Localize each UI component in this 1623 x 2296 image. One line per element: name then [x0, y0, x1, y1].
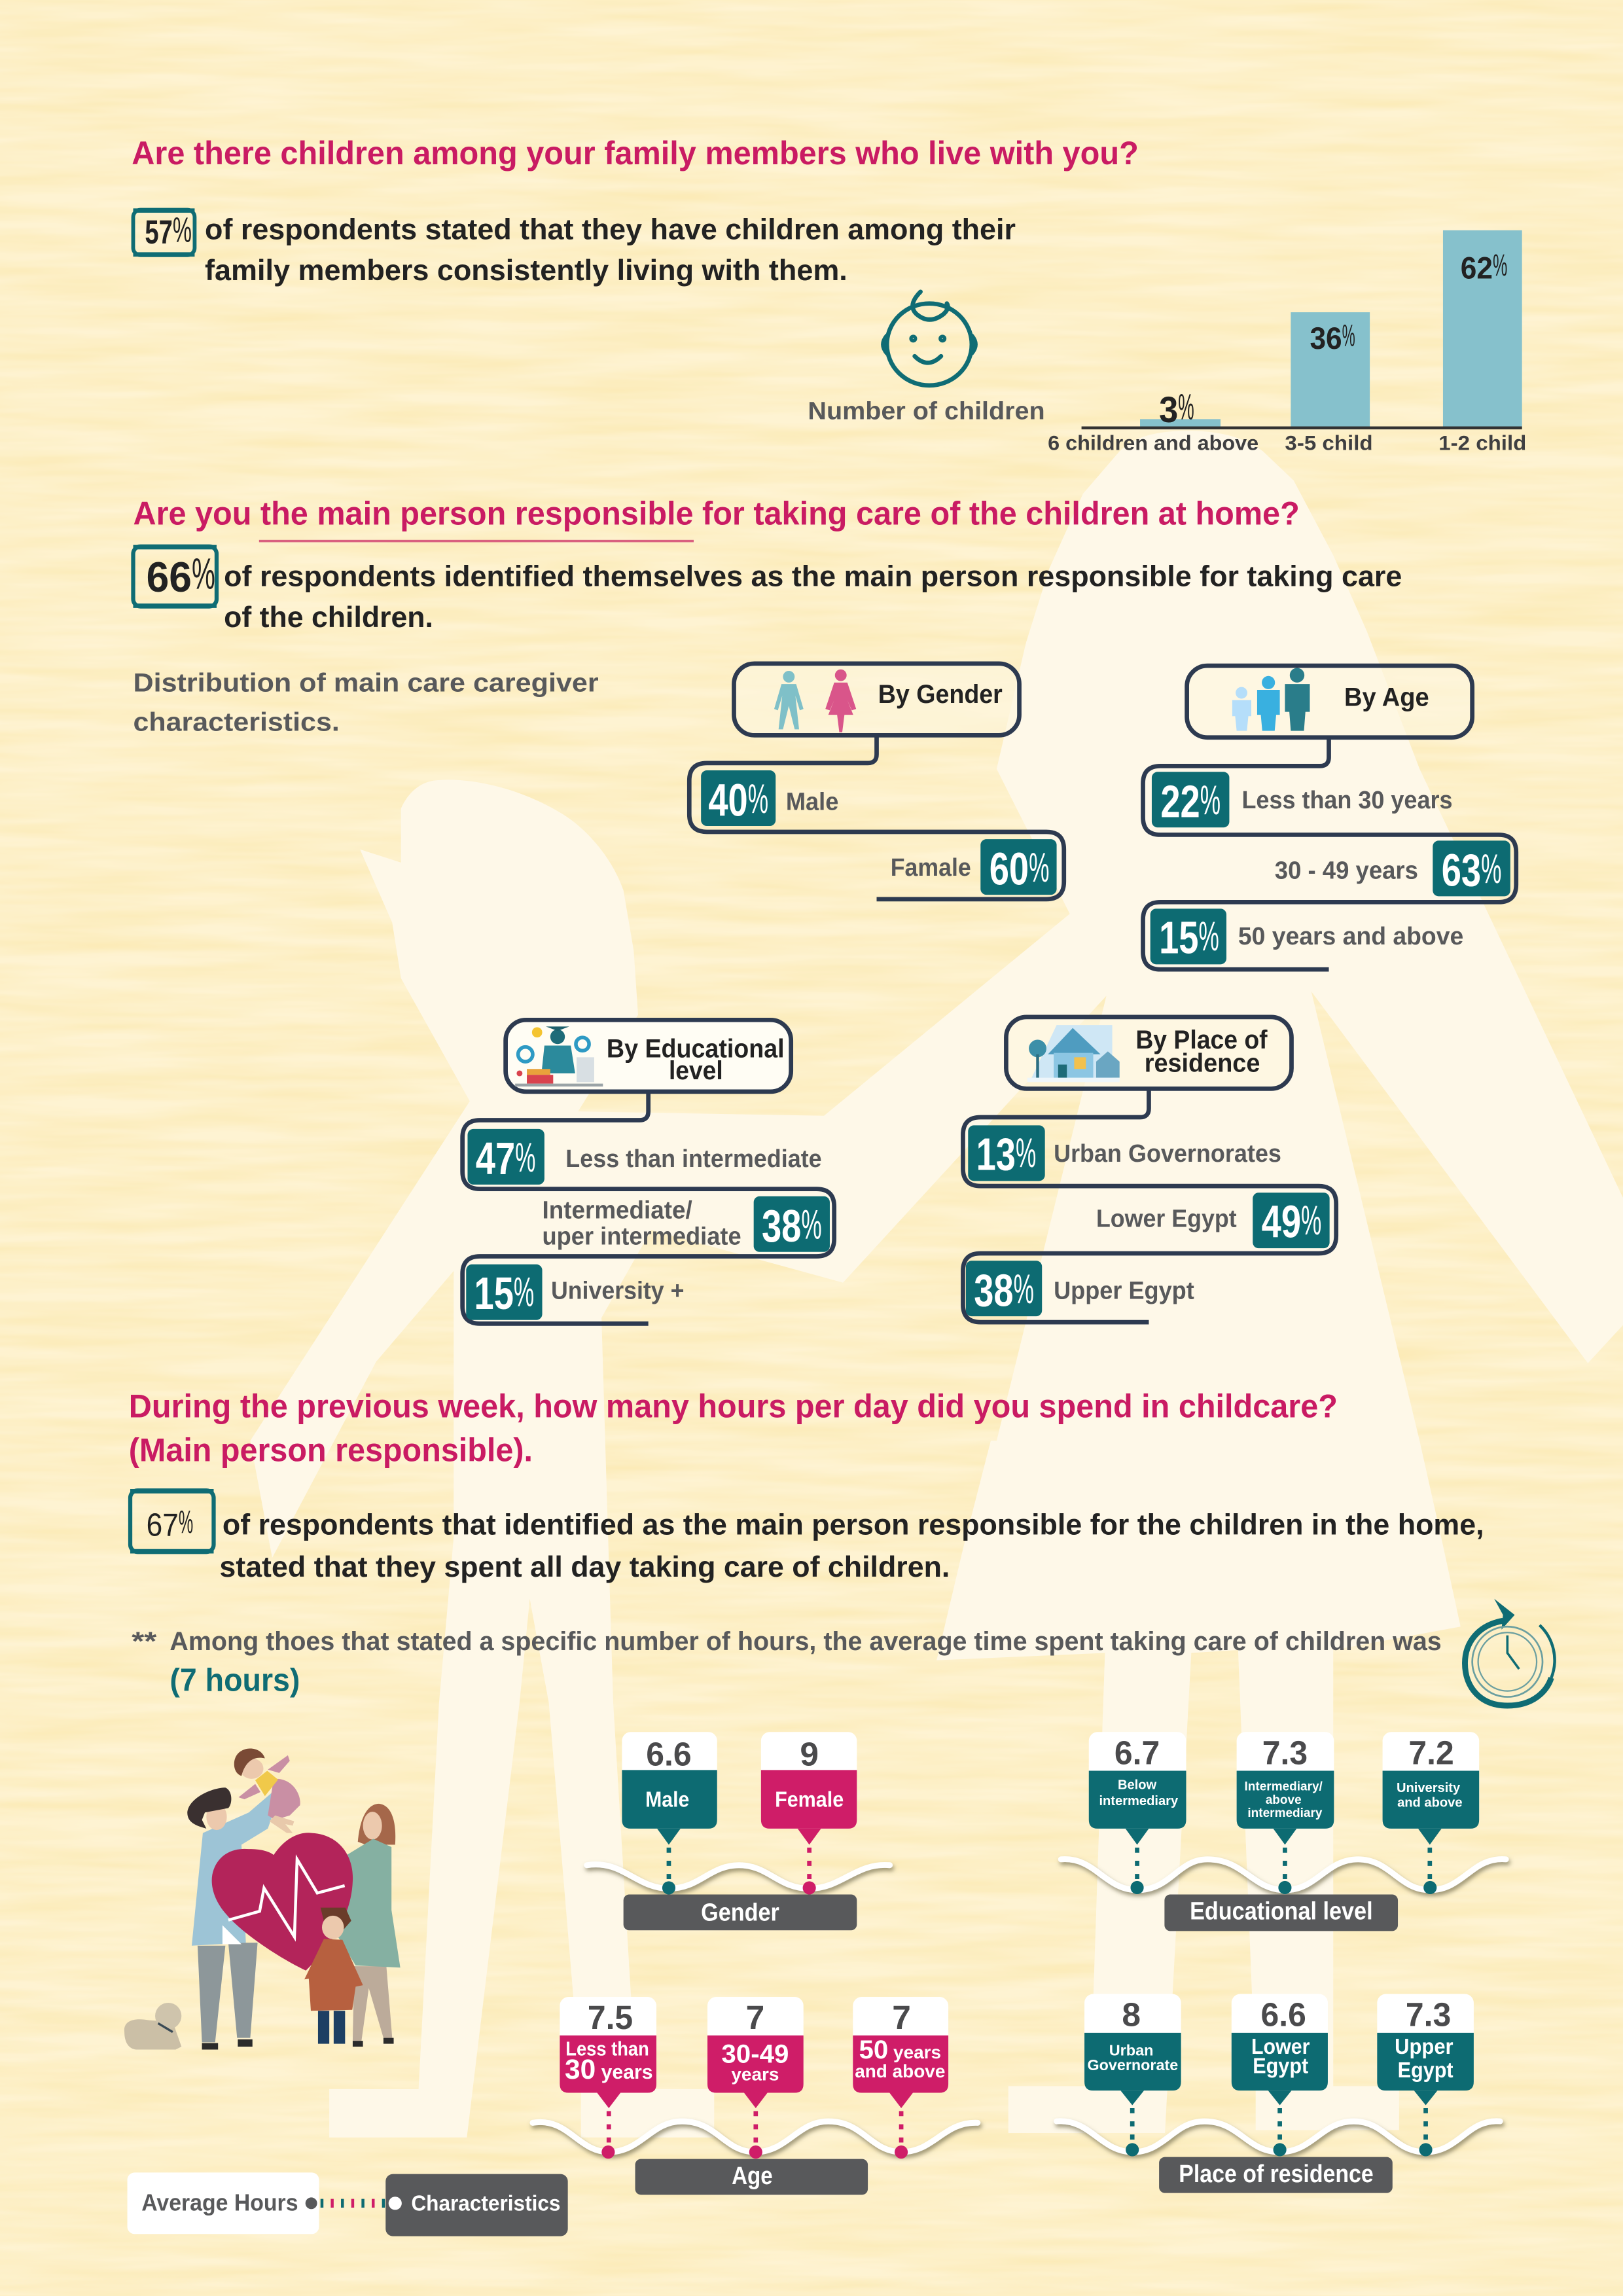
stat: 50 and above: [1150, 908, 1463, 964]
pin: intermediary 7.3: Intermediary/: [1245, 1780, 1323, 1794]
pin: female 9: [761, 1732, 857, 1894]
stat: lower egypt: [1096, 1193, 1330, 1248]
pin: 30-49 7: years: [731, 2064, 779, 2084]
bar chart: number of children: 62: [1461, 251, 1493, 285]
pin: less than 30 7.5: 30 years: [565, 2054, 653, 2085]
text: average time note: **: [132, 1626, 157, 1656]
bar: educational level: Educational level: [1190, 1898, 1373, 1926]
pin: 50 and above 7: 50 years: [859, 2035, 941, 2064]
pin: less than 30 7.5: [560, 1997, 656, 2159]
legend: average hours box: Average Hours: [141, 2190, 298, 2216]
pin: lower egypt 6.6: Egypt: [1253, 2054, 1308, 2078]
title: main person responsible: Are you the main person responsible for taking care of the children at home?: [133, 494, 1300, 531]
stat: female 60 percent: %: [1029, 845, 1049, 891]
pin: below intermediary 6.7: [1089, 1732, 1186, 1894]
stat: 30 to 49: %: [1481, 846, 1501, 892]
stat: urban governorates: Urban Governorates: [1054, 1140, 1281, 1168]
panel: place of residence hours: [1057, 1994, 1500, 2193]
pin: intermediary 7.3: 7.3: [1262, 1733, 1308, 1771]
background silhouette: family: [250, 431, 1623, 2138]
stat box 57%: [133, 210, 194, 255]
bar: gender: [624, 1894, 857, 1930]
header: by place of residence: [1006, 1017, 1291, 1088]
pin: 30-49 7: 30-49: [721, 2039, 789, 2069]
stat box 57%: %: [173, 211, 192, 250]
pin: below intermediary 6.7: 6.7: [1115, 1733, 1160, 1771]
text: average time note: Among thoes that stated a specific number of hours, the average time spent taking care of children was: [169, 1626, 1442, 1656]
bar chart: number of children: 6 children and above: [1048, 431, 1258, 454]
stat box 57%: 57: [145, 213, 173, 251]
stat: less than intermediate: 47: [476, 1133, 515, 1184]
stat: under 30: [1152, 772, 1452, 827]
pin: lower egypt 6.6: 6.6: [1261, 1996, 1306, 2034]
stat: urban governorates: %: [1016, 1130, 1036, 1176]
stat: lower egypt: 49: [1262, 1196, 1301, 1247]
stat box 66%: 66: [147, 553, 192, 601]
pin: university 7.2: and above: [1397, 1795, 1463, 1810]
stat: lower egypt: %: [1301, 1198, 1321, 1244]
pin: intermediary 7.3: [1237, 1732, 1334, 1894]
header: by educational level: By Educational: [607, 1033, 785, 1063]
pin: male 6.6: Male: [645, 1787, 689, 1812]
text: 57 percent statement: [205, 213, 1016, 287]
header: by place of residence: residence: [1145, 1049, 1260, 1078]
pin: male 6.6: 6.6: [646, 1735, 692, 1773]
header: by educational level: [506, 1020, 791, 1092]
icon: three age figures: [1232, 668, 1310, 731]
bar chart: number of children: %: [1493, 247, 1507, 282]
stat: male 40 percent: 40: [708, 774, 748, 825]
pin: urban 8: Governorate: [1088, 2056, 1178, 2073]
pin: female 9: 9: [800, 1735, 819, 1773]
header: by gender: [734, 664, 1020, 735]
pin: below intermediary 6.7: intermediary: [1099, 1794, 1179, 1808]
icon: male figure: [774, 671, 804, 729]
bar chart: number of children: 1-2 child: [1438, 431, 1526, 454]
panel: by age: [1143, 666, 1516, 969]
pin: lower egypt 6.6: [1232, 1994, 1328, 2157]
stat: less than intermediate: [467, 1129, 822, 1185]
pin: upper egypt 7.3: 7.3: [1406, 1996, 1451, 2034]
bar chart: number of children: 36: [1310, 321, 1342, 355]
text: 57 percent statement: family members consistently living with them.: [205, 255, 847, 287]
panel: gender hours: [587, 1732, 890, 1930]
text: 67 percent statement: stated that they spent all day taking care of children.: [219, 1551, 950, 1583]
wave: age: [533, 2121, 978, 2152]
pin: 30-49 7: 7: [746, 1998, 764, 2036]
bar chart: number of children: %: [1342, 318, 1355, 353]
stat: upper egypt: %: [1014, 1266, 1034, 1312]
stat: urban governorates: 13: [976, 1129, 1016, 1180]
text: distribution of caregivers: [133, 668, 599, 737]
stat: intermediate: [543, 1196, 830, 1252]
pin: intermediary 7.3: above: [1266, 1793, 1302, 1807]
stat: lower egypt: Lower Egypt: [1096, 1206, 1237, 1233]
connector bracket: [1143, 737, 1516, 969]
bar: gender: Gender: [701, 1899, 779, 1927]
father legs: [198, 1943, 258, 2042]
pin: upper egypt 7.3: [1377, 1994, 1474, 2157]
icon: clock with arrow: [1465, 1599, 1555, 1706]
text: 66 percent statement: [224, 560, 1402, 634]
panel: by gender: [689, 664, 1064, 899]
stat box 67%: [130, 1490, 213, 1552]
stat: 50 and above: 50 years and above: [1238, 923, 1463, 950]
pin: urban 8: [1084, 1994, 1181, 2157]
pin: university 7.2: [1383, 1732, 1479, 1894]
wave: educational: [1061, 1859, 1506, 1890]
header: by age: By Age: [1344, 683, 1429, 712]
child: [318, 2011, 345, 2044]
panel: by educational level: [463, 1020, 834, 1323]
stat: less than intermediate: %: [515, 1135, 535, 1181]
stat: female 60 percent: Famale: [891, 854, 971, 882]
connector bracket: [463, 1091, 834, 1323]
header: by educational level: level: [669, 1056, 723, 1085]
stat: university: [466, 1265, 684, 1320]
legend: characteristics box: Characteristics: [411, 2192, 560, 2216]
text: 67 percent statement: of respondents that identified as the main person responsible for the children in the home,: [223, 1509, 1484, 1541]
connector bracket: [963, 1088, 1336, 1322]
icon: female figure: [825, 670, 856, 732]
dog: [124, 2003, 181, 2050]
legend: characteristics box: [385, 2174, 568, 2236]
bar: place of residence: [1159, 2157, 1393, 2193]
text: distribution of caregivers: characteristics.: [133, 708, 340, 737]
icon: house: [1027, 1025, 1120, 1082]
stat: upper egypt: Upper Egypt: [1054, 1277, 1194, 1304]
bar chart: number of children: 3-5 child: [1285, 431, 1373, 454]
wave: gender: [587, 1865, 890, 1889]
stat: 50 and above: %: [1198, 914, 1219, 960]
text: average time note: [132, 1626, 1442, 1698]
pin: upper egypt 7.3: Upper: [1395, 2035, 1454, 2059]
stat: female 60 percent: 60: [990, 843, 1029, 894]
panel: age hours: [533, 1997, 978, 2195]
legend: average hours to characteristics: [128, 2172, 568, 2236]
pin: lower egypt 6.6: Lower: [1251, 2035, 1310, 2059]
stat: intermediate: 38: [762, 1200, 801, 1251]
bar: age: [635, 2159, 868, 2195]
icon: education cluster: [515, 1026, 603, 1086]
pin: upper egypt 7.3: Egypt: [1398, 2058, 1454, 2083]
stat: under 30: Less than 30 years: [1241, 787, 1452, 814]
text: distribution of caregivers: Distribution of main care caregiver: [133, 668, 599, 697]
pin: 30-49 7: [707, 1997, 804, 2159]
stat: urban governorates: [968, 1125, 1281, 1181]
illustration: family with heart: [124, 1748, 401, 2050]
bar chart: number of children: %: [1178, 386, 1194, 427]
text: 57 percent statement: of respondents stated that they have children among their: [205, 213, 1016, 245]
legend: average hours box: [128, 2172, 319, 2234]
stat: under 30: 22: [1160, 776, 1200, 827]
stat box 66%: %: [192, 550, 215, 599]
stat: less than intermediate: Less than intermediate: [565, 1145, 822, 1173]
icon: baby face: [883, 292, 975, 386]
stat: 30 to 49: 30 - 49 years: [1275, 857, 1418, 885]
pin: 50 and above 7: and above: [855, 2061, 945, 2081]
pin: female 9: Female: [775, 1787, 844, 1812]
stat: female 60 percent: [891, 839, 1057, 895]
bar: age: Age: [732, 2162, 773, 2190]
panel: by place of residence: [963, 1017, 1336, 1322]
pin: less than 30 7.5: Less than: [565, 2038, 649, 2060]
header: by age: [1187, 666, 1472, 738]
title: hours per day in childcare: During the previous week, how many hours per day did you spend in childcare?: [129, 1387, 1338, 1424]
stat box 67%: %: [179, 1504, 193, 1540]
baby: [268, 1779, 300, 1820]
pin: 50 and above 7: [853, 1997, 948, 2159]
stat: 50 and above: 15: [1159, 912, 1198, 963]
bar: educational level: [1164, 1894, 1398, 1931]
mother: [353, 1966, 392, 2041]
text: 66 percent statement: of the children.: [224, 601, 433, 634]
stat: university: University +: [551, 1277, 684, 1304]
panel: educational level hours: [1061, 1732, 1506, 1931]
text: average time note: (7 hours): [169, 1662, 300, 1698]
bar chart: number of children: 3: [1159, 389, 1178, 430]
stat: upper egypt: [966, 1261, 1194, 1316]
bar chart: number of children: [1048, 230, 1526, 454]
chart label: number of children: Number of children: [808, 397, 1045, 425]
stat: university: %: [514, 1270, 534, 1316]
pin: urban 8: Urban: [1109, 2041, 1154, 2058]
father body: [192, 1782, 285, 1946]
title: hours per day in childcare: (Main person responsible).: [129, 1431, 533, 1469]
pin: less than 30 7.5: 7.5: [588, 1998, 633, 2036]
stat: 30 to 49: [1275, 840, 1510, 896]
text: 66 percent statement: of respondents identified themselves as the main person responsible for taking care: [224, 560, 1402, 592]
stat: university: 15: [474, 1268, 514, 1319]
stat box 67%: 67: [147, 1507, 179, 1543]
pin: male 6.6: [622, 1732, 717, 1894]
stat: male 40 percent: %: [748, 776, 768, 822]
pin: intermediary 7.3: intermediary: [1247, 1806, 1323, 1820]
title: hours per day in childcare: [129, 1387, 1338, 1469]
stat: intermediate: %: [801, 1202, 822, 1248]
pin: below intermediary 6.7: Below: [1118, 1778, 1157, 1792]
text: 67 percent statement: [219, 1509, 1484, 1583]
header: by gender: By Gender: [878, 679, 1003, 709]
stat: 30 to 49: 63: [1442, 845, 1481, 896]
pin: 50 and above 7: 7: [892, 1998, 911, 2036]
stat box 66%: [133, 547, 217, 607]
pin: urban 8: 8: [1122, 1996, 1141, 2034]
stat: under 30: %: [1200, 778, 1221, 823]
bar: place of residence: Place of residence: [1179, 2161, 1374, 2188]
stat: male 40 percent: [701, 770, 838, 826]
connector bracket: [689, 735, 1064, 899]
stat: upper egypt: 38: [974, 1265, 1014, 1316]
wave: place: [1057, 2121, 1500, 2152]
stat: male 40 percent: Male: [786, 788, 838, 816]
pin: university 7.2: University: [1397, 1781, 1461, 1795]
pin: university 7.2: 7.2: [1408, 1733, 1454, 1771]
header: by place of residence: By Place of: [1135, 1025, 1268, 1054]
stat: intermediate: Intermediate/: [543, 1196, 692, 1224]
stat: intermediate: uper intermediate: [543, 1223, 741, 1251]
heart: [212, 1833, 353, 1971]
title: children living with you: Are there children among your family members who live with you?: [132, 134, 1139, 171]
